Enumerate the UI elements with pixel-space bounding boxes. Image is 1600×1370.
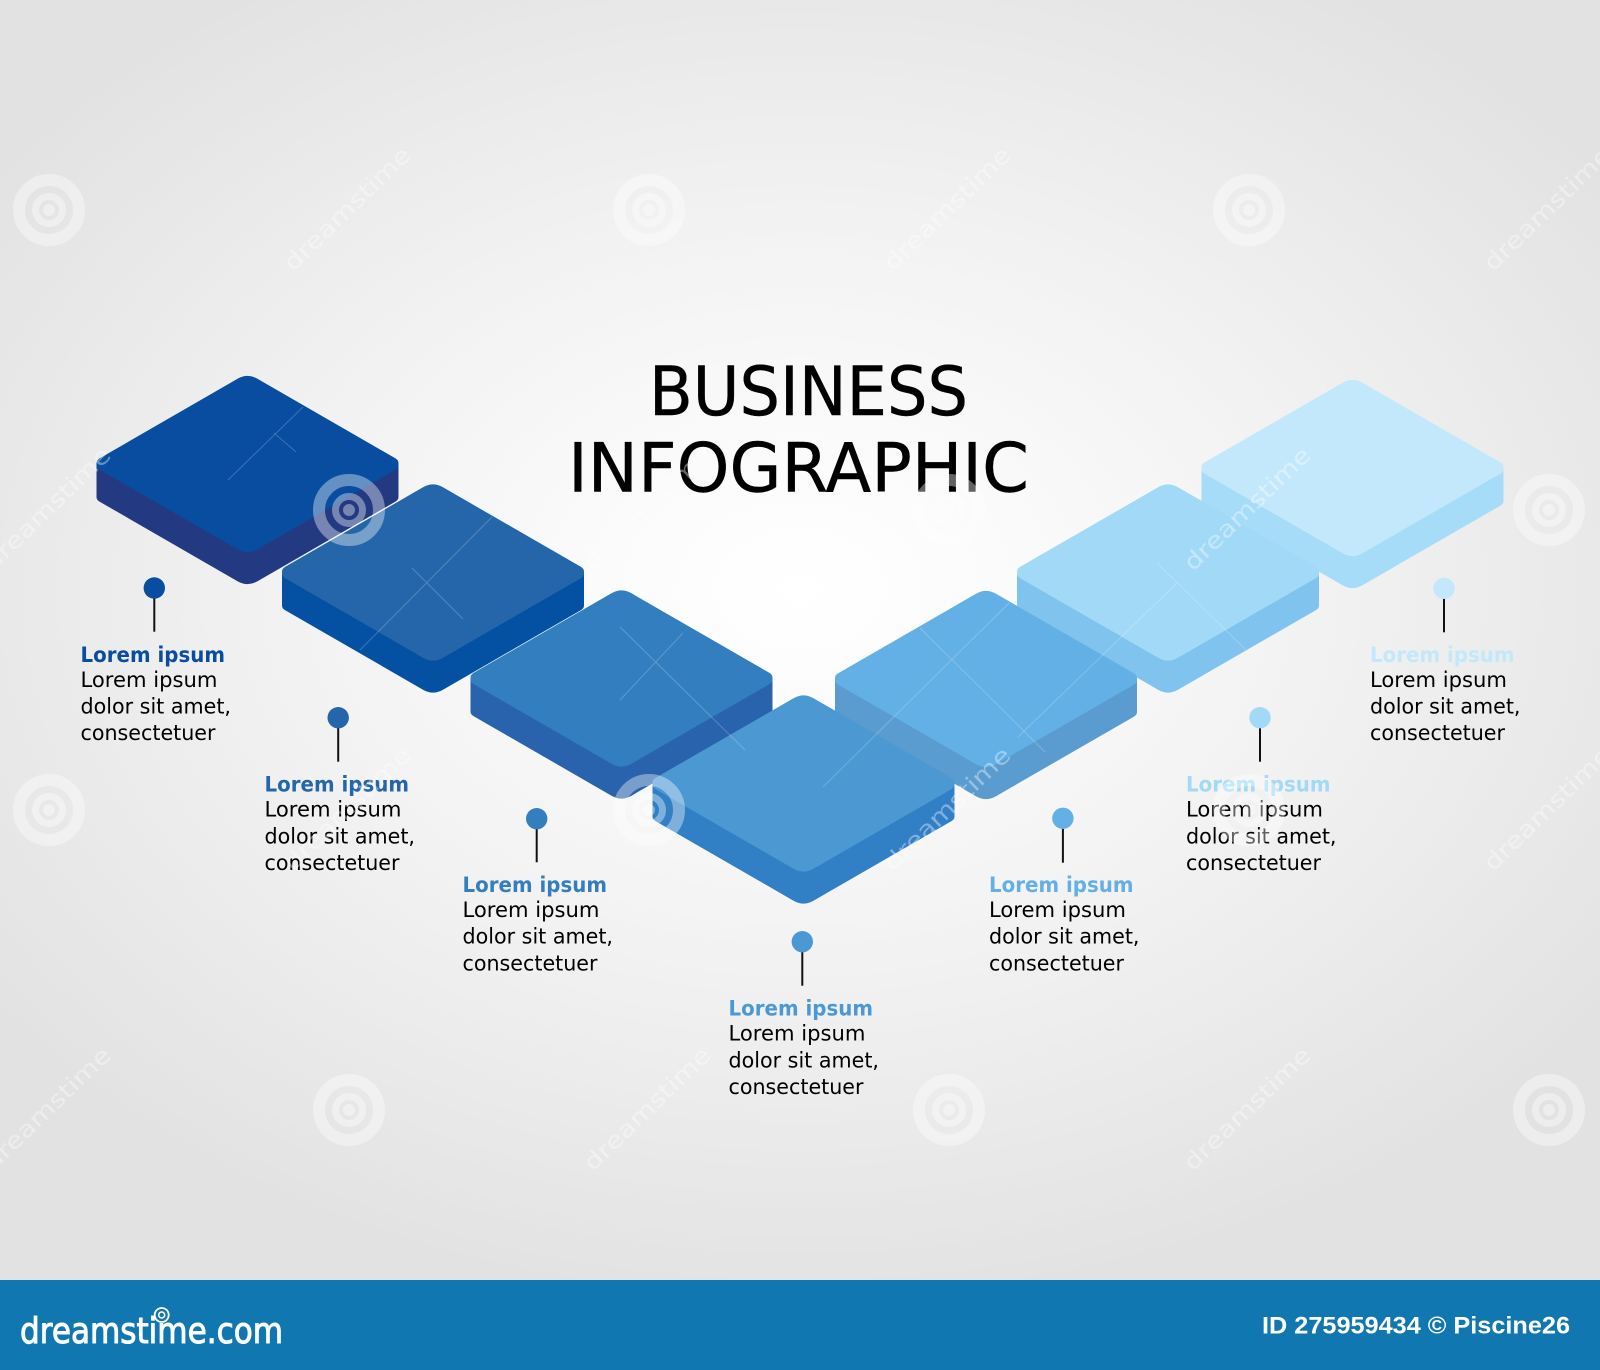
block 4 side — [652, 784, 954, 904]
title: BUSINESS — [649, 352, 968, 431]
text block 7: consectetuer — [1370, 721, 1505, 746]
text block 6: Lorem ipsum — [1186, 773, 1330, 798]
block 5 — [835, 591, 1137, 799]
text block 3 — [462, 873, 613, 976]
text block 2: Lorem ipsum — [264, 798, 402, 823]
text block 5: consectetuer — [989, 951, 1124, 976]
footer credit: ID 275959434 © Piscine26 — [1262, 1312, 1570, 1339]
watermark text: dreamstime — [879, 142, 1017, 276]
block 7 — [1202, 380, 1504, 588]
block 2 top face — [282, 484, 584, 661]
text block 2: dolor sit amet, — [264, 824, 415, 849]
watermark spirals — [19, 180, 1579, 1140]
pin 4 — [792, 931, 813, 986]
footer band — [0, 1280, 1600, 1370]
text block 7: Lorem ipsum — [1370, 668, 1507, 693]
text block 6: dolor sit amet, — [1186, 824, 1336, 849]
text block 4 — [728, 997, 879, 1100]
text block 2 — [264, 773, 415, 876]
block 2 side — [282, 572, 584, 693]
pin 2 — [328, 707, 349, 762]
text block 6: consectetuer — [1186, 851, 1321, 876]
text block 1: Lorem ipsum — [80, 668, 218, 693]
text block 3: consectetuer — [462, 951, 598, 976]
watermark text: dreamstime — [279, 142, 417, 276]
text block 1 — [80, 643, 231, 746]
text block 5 — [989, 873, 1140, 976]
text block 7: Lorem ipsum — [1370, 643, 1514, 668]
block 1 top face — [96, 376, 398, 552]
watermark text: dreamstime — [879, 742, 1017, 876]
text block 5: Lorem ipsum — [989, 873, 1134, 898]
block 6 side — [1017, 572, 1319, 693]
watermark text: dreamstime — [1179, 1042, 1317, 1176]
text block 5: Lorem ipsum — [989, 898, 1126, 923]
block 6 top face — [1017, 484, 1319, 661]
watermark text — [0, 142, 1600, 1176]
pin 5 — [1052, 808, 1074, 863]
text block 6 — [1186, 773, 1336, 876]
logo spiral — [155, 1308, 169, 1322]
text block 3: dolor sit amet, — [462, 925, 613, 950]
block 2 — [282, 484, 584, 693]
watermark text: dreamstime — [1479, 742, 1600, 876]
title: INFOGRAPHIC — [568, 429, 1029, 508]
pin 3 — [526, 808, 547, 862]
watermark text: dreamstime — [579, 442, 717, 576]
block 5 side — [835, 679, 1137, 799]
watermark text: dreamstime — [1479, 142, 1600, 276]
block 6 — [1017, 484, 1319, 693]
block 7 top face — [1202, 380, 1504, 556]
title — [568, 352, 1029, 508]
text block 6: Lorem ipsum — [1186, 798, 1323, 823]
block 4 top face — [652, 695, 954, 872]
text block 4: Lorem ipsum — [728, 997, 873, 1022]
block 3 — [470, 590, 772, 799]
pin 1 — [144, 577, 165, 632]
text block 4: consectetuer — [728, 1075, 864, 1100]
footer logo: dreamstime.com — [20, 1311, 283, 1352]
pin 7 — [1433, 578, 1455, 632]
block 7 side — [1202, 468, 1504, 588]
text block 7 — [1370, 643, 1520, 746]
watermark text: dreamstime — [279, 742, 417, 876]
text block 4: dolor sit amet, — [728, 1048, 879, 1073]
text block 2: Lorem ipsum — [264, 773, 409, 798]
block 3 side — [470, 678, 772, 799]
text block 1: consectetuer — [80, 721, 216, 746]
block 1 side — [96, 464, 398, 584]
block 5 top face — [835, 591, 1137, 767]
text block 3: Lorem ipsum — [462, 873, 607, 898]
block 1 — [96, 376, 398, 584]
text block 1: dolor sit amet, — [80, 694, 231, 720]
text block 7: dolor sit amet, — [1370, 694, 1520, 720]
text block 4: Lorem ipsum — [728, 1022, 866, 1047]
text block 2: consectetuer — [264, 851, 400, 876]
pin 6 — [1249, 707, 1271, 762]
text block 5: dolor sit amet, — [989, 925, 1140, 950]
text block 3: Lorem ipsum — [462, 898, 600, 923]
block 4 — [652, 695, 954, 904]
text block 1: Lorem ipsum — [80, 643, 225, 668]
block 3 top face — [470, 590, 772, 767]
watermark text: dreamstime — [1179, 442, 1317, 576]
watermark text: dreamstime — [579, 1042, 717, 1176]
